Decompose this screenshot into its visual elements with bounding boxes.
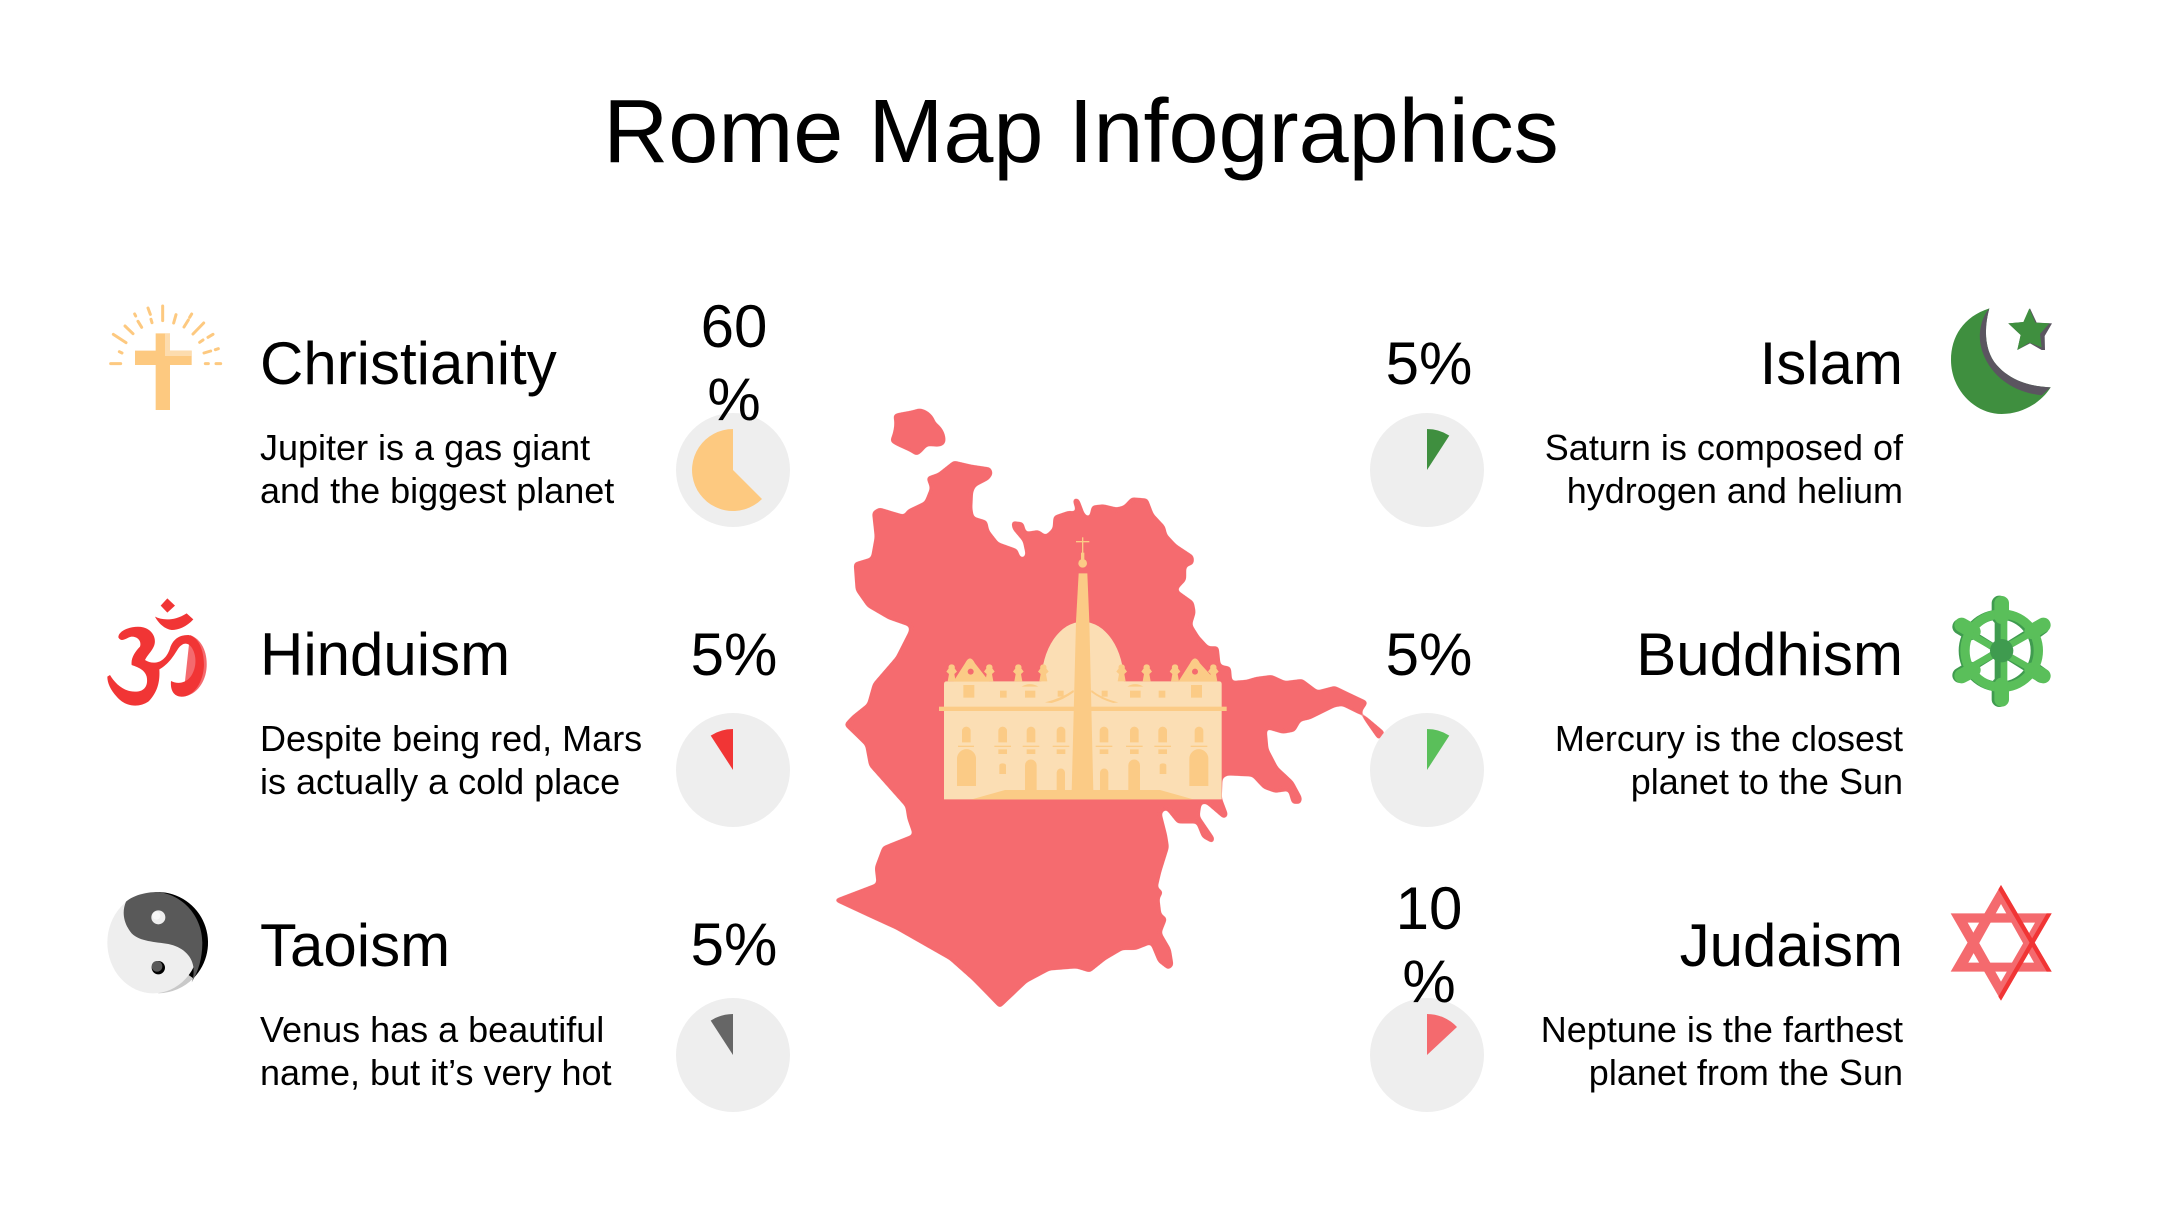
description [260, 718, 642, 802]
icon: om [107, 598, 207, 706]
description [260, 1009, 612, 1093]
description [260, 427, 614, 511]
description: hydrogen and helium [1567, 470, 1903, 511]
value: 60%: 60 % [701, 293, 767, 433]
pie: 5 percent [1370, 413, 1484, 527]
description [1541, 1009, 1903, 1093]
map silhouette [836, 408, 1384, 1007]
description: Saturn is composed of [1545, 427, 1903, 468]
description [1555, 718, 1903, 802]
heading: Taoism: Taoism [260, 912, 450, 979]
description: Venus has a beautiful [260, 1009, 604, 1050]
icon: dharma wheel [1952, 596, 2051, 707]
heading: Buddhism: Buddhism [1636, 621, 1903, 688]
pie: 5 percent [1370, 713, 1484, 827]
icon: crescent and star [1951, 308, 2052, 414]
panel: Buddhism [1370, 596, 2051, 827]
heading: Christianity: Christianity [260, 330, 557, 397]
title: Rome Map Infographics [603, 82, 1559, 182]
description: Neptune is the farthest [1541, 1009, 1903, 1050]
pie: 60 percent [676, 413, 790, 527]
description: name, but it’s very hot [260, 1052, 612, 1093]
panel: Christianity [109, 293, 790, 527]
value: 5%: 5% [691, 911, 777, 978]
panel: Islam [1370, 308, 2052, 527]
value: 5%: 5% [691, 621, 777, 688]
description: planet to the Sun [1631, 761, 1903, 802]
description: planet from the Sun [1589, 1052, 1903, 1093]
heading: Islam: Islam [1760, 330, 1903, 397]
panel: Hinduism [107, 598, 790, 827]
heading: Hinduism: Hinduism [260, 621, 510, 688]
pie: 5 percent [676, 998, 790, 1112]
heading: Judaism: Judaism [1680, 912, 1903, 979]
icon: cross with rays [109, 304, 222, 410]
map of Rome with basilica [836, 408, 1384, 1007]
value: 5%: 5% [1386, 330, 1472, 397]
description: is actually a cold place [260, 761, 620, 802]
panel: Taoism [108, 892, 790, 1112]
value: 10%: 10 % [1396, 875, 1462, 1015]
description: Jupiter is a gas giant [260, 427, 590, 468]
description [1545, 427, 1904, 511]
description: and the biggest planet [260, 470, 614, 511]
pie: 10 percent [1370, 998, 1484, 1112]
description: Mercury is the closest [1555, 718, 1903, 759]
panel: Judaism [1370, 875, 2052, 1112]
value: 5%: 5% [1386, 621, 1472, 688]
icon: star of David [1950, 885, 2052, 1000]
icon: yin yang [108, 892, 208, 994]
basilica illustration [939, 537, 1227, 800]
description: Despite being red, Mars [260, 718, 642, 759]
pie: 5 percent [676, 713, 790, 827]
